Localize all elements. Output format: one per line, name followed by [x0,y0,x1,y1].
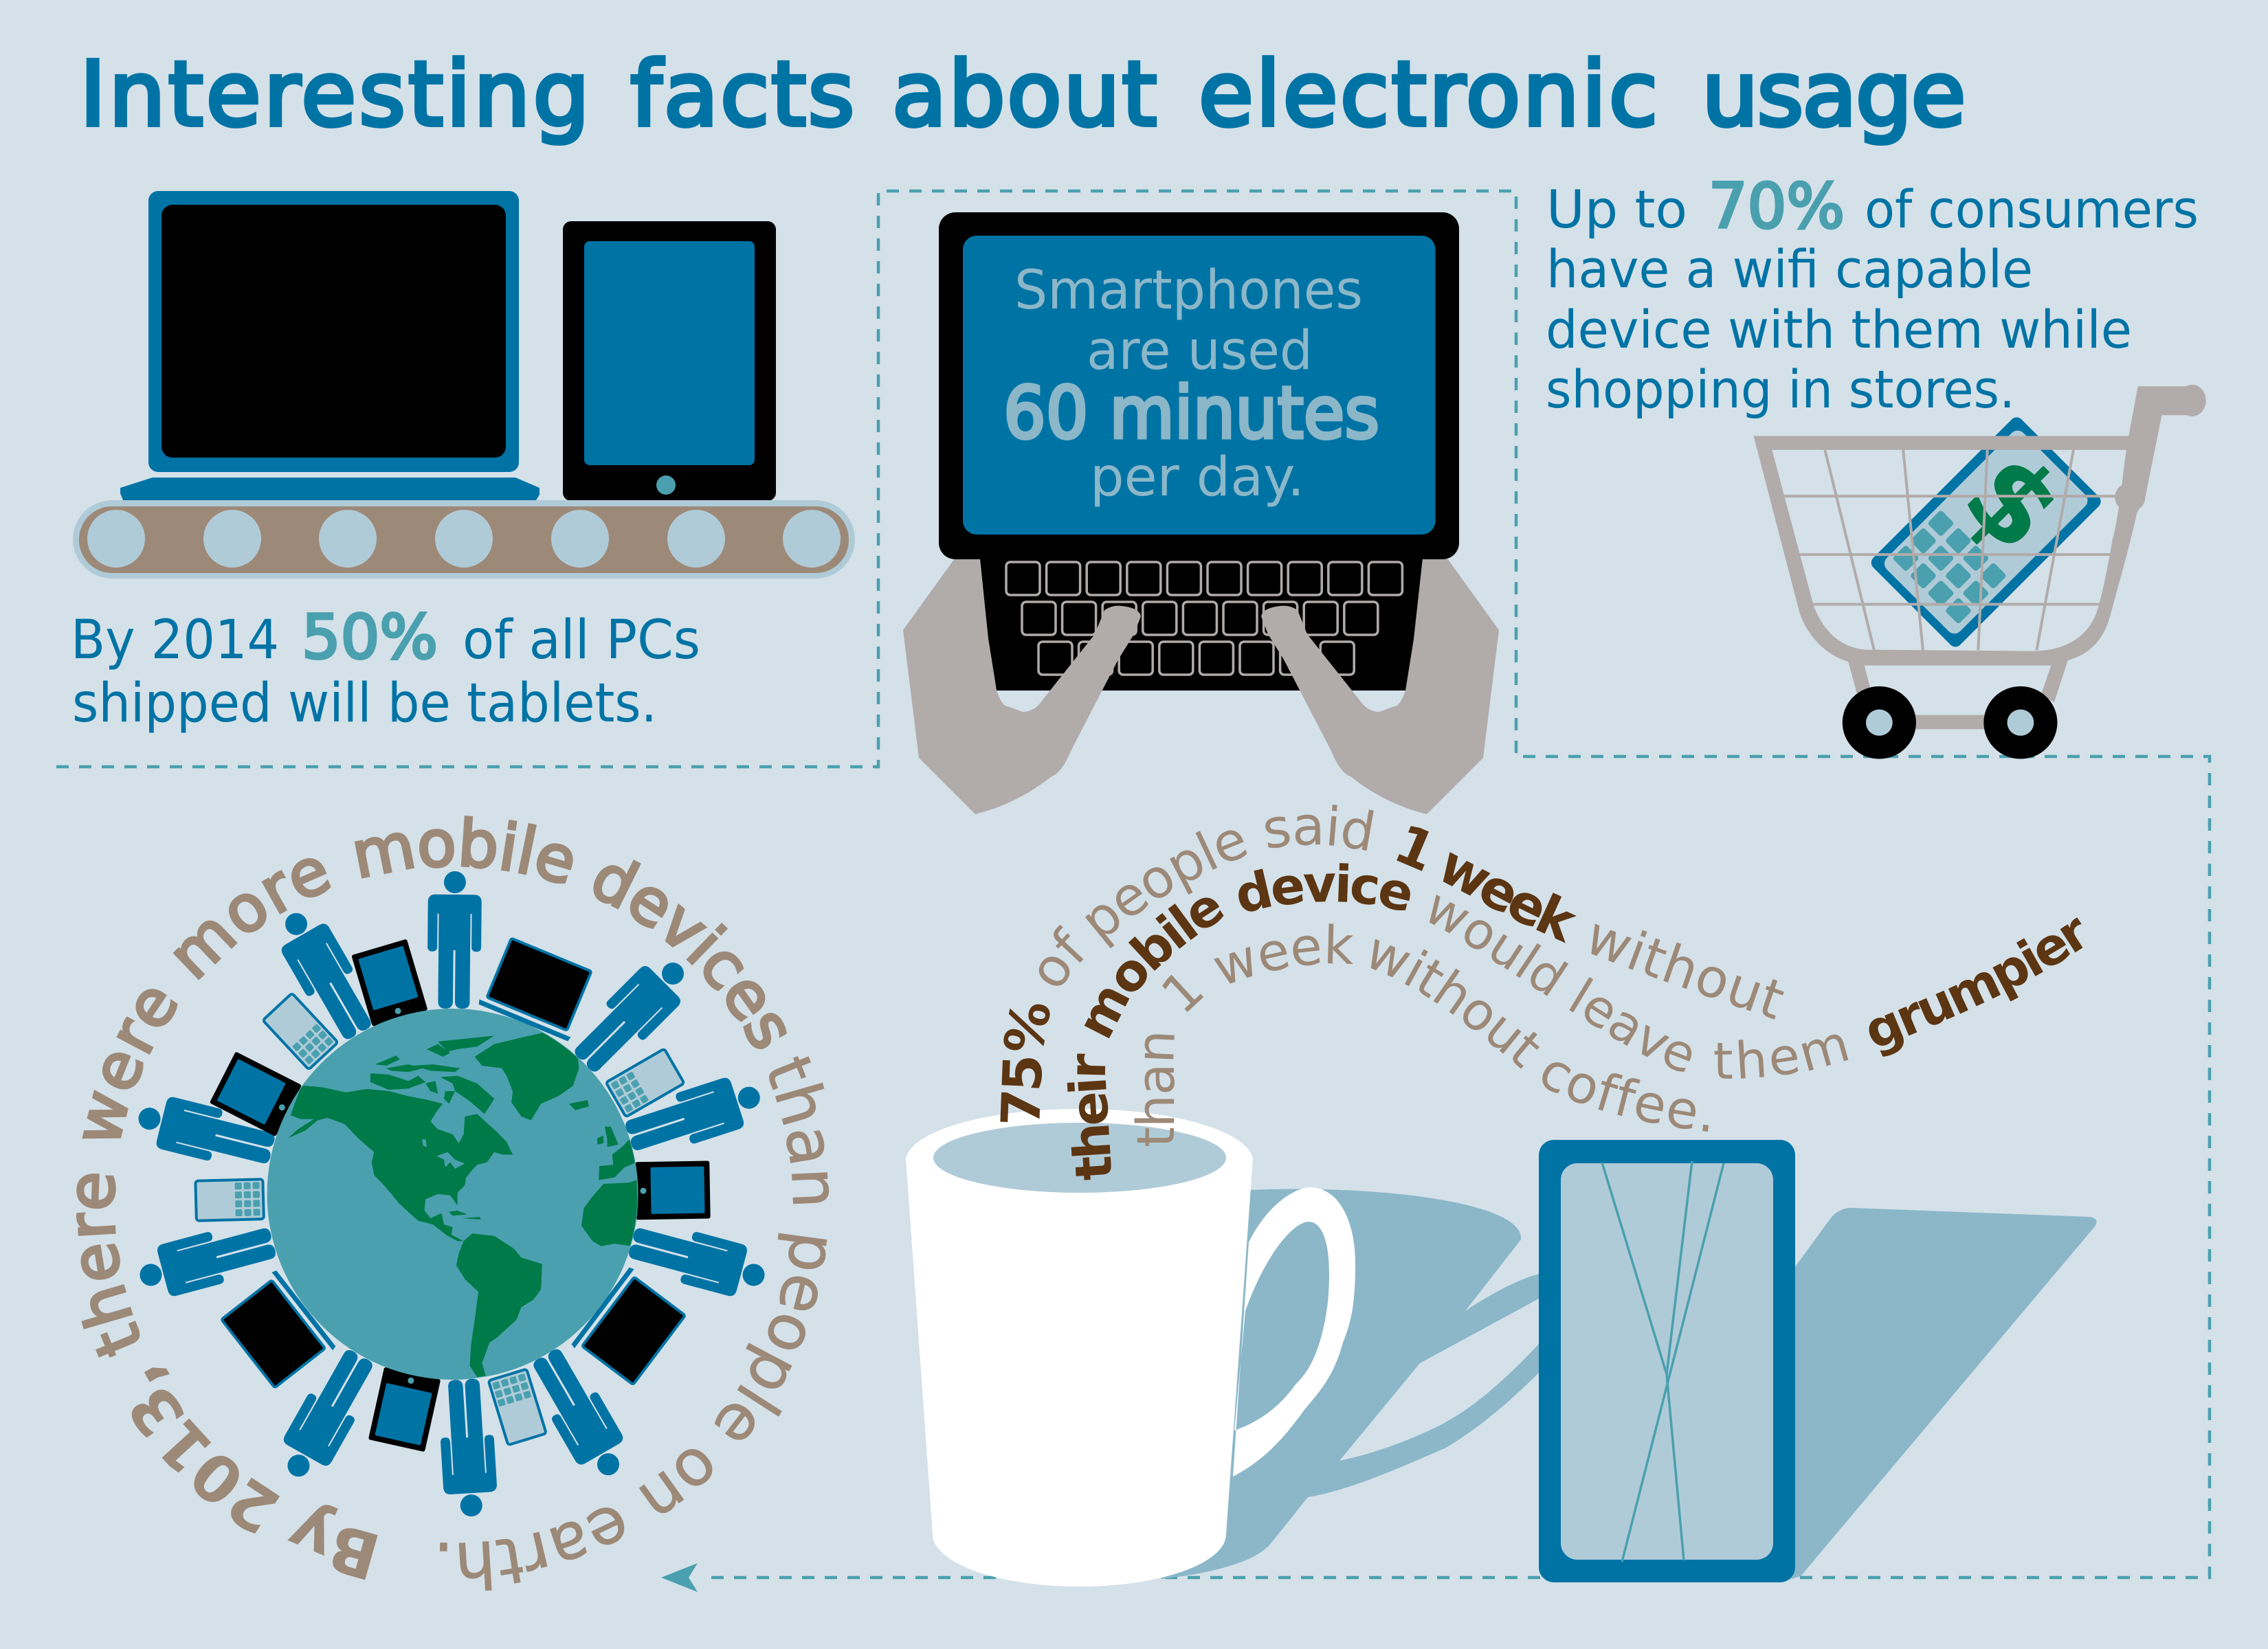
text: smartphone statistic: are used [1087,320,1313,382]
text: wifi statistic: device with them while [1546,299,2132,360]
mug shadow [1130,1189,1540,1579]
icon: cart [1754,385,2206,759]
text: wifi statistic: shopping in stores. [1546,359,2015,420]
text: steam line 2: their mobile device would leave them grumpier [1067,863,2082,1180]
text: wifi statistic [1546,170,2199,420]
text: steam line 1: 75% of people said 1 week without [1000,805,1784,1122]
text: tablets statistic: 50% [302,602,438,673]
text: wifi statistic: 70% [1709,170,1845,243]
figures and devices around globe [133,871,771,1518]
icon: smartphone screen [939,212,1459,559]
icon: keyboard [979,553,1424,691]
icon: tablet [563,221,776,501]
text: smartphone statistic: per day. [1090,447,1304,508]
panel: shopping cart [1546,170,2206,759]
icon: globe [267,1009,638,1380]
icon: conveyor belt [73,500,855,579]
text: steam line 3: than 1 week without coffee. [1134,923,1709,1146]
text: tablets statistic [71,602,700,734]
text: circular statement: By 2013, there were more mobile devices than people on earth. [76,816,829,1591]
panel: coffee and phone [906,805,2096,1587]
icon: broken phone [1539,1140,1795,1582]
text: smartphone statistic: Smartphones [1014,260,1363,322]
icon: laptop [120,191,540,500]
panel: tablets on conveyor [71,191,855,734]
text: tablets statistic: By 2014 [71,609,279,671]
text: wifi statistic: of consumers [1865,179,2199,240]
icon: right hand [1261,558,1499,814]
icon: phone with dollar sign: $ [1939,427,2088,576]
icon: left hand [903,558,1141,814]
text: tablets statistic: of all PCs [463,609,700,671]
panel: smartphone in hands [903,212,1499,814]
text: tablets statistic: shipped will be tablets. [72,673,657,734]
phone shadow [1787,1208,2097,1580]
text: wifi statistic: Up to [1546,179,1687,240]
icon: mug [906,1109,1355,1586]
text: wifi statistic: have a wifi capable [1546,238,2033,300]
text: smartphone statistic: 60 minutes [1003,371,1379,455]
panel: mobile devices vs people globe [76,816,829,1591]
title: Interesting facts about electronic usage [80,42,1964,146]
icon: phone with dollar sign [1869,414,2104,649]
text: smartphone statistic [1003,260,1379,508]
